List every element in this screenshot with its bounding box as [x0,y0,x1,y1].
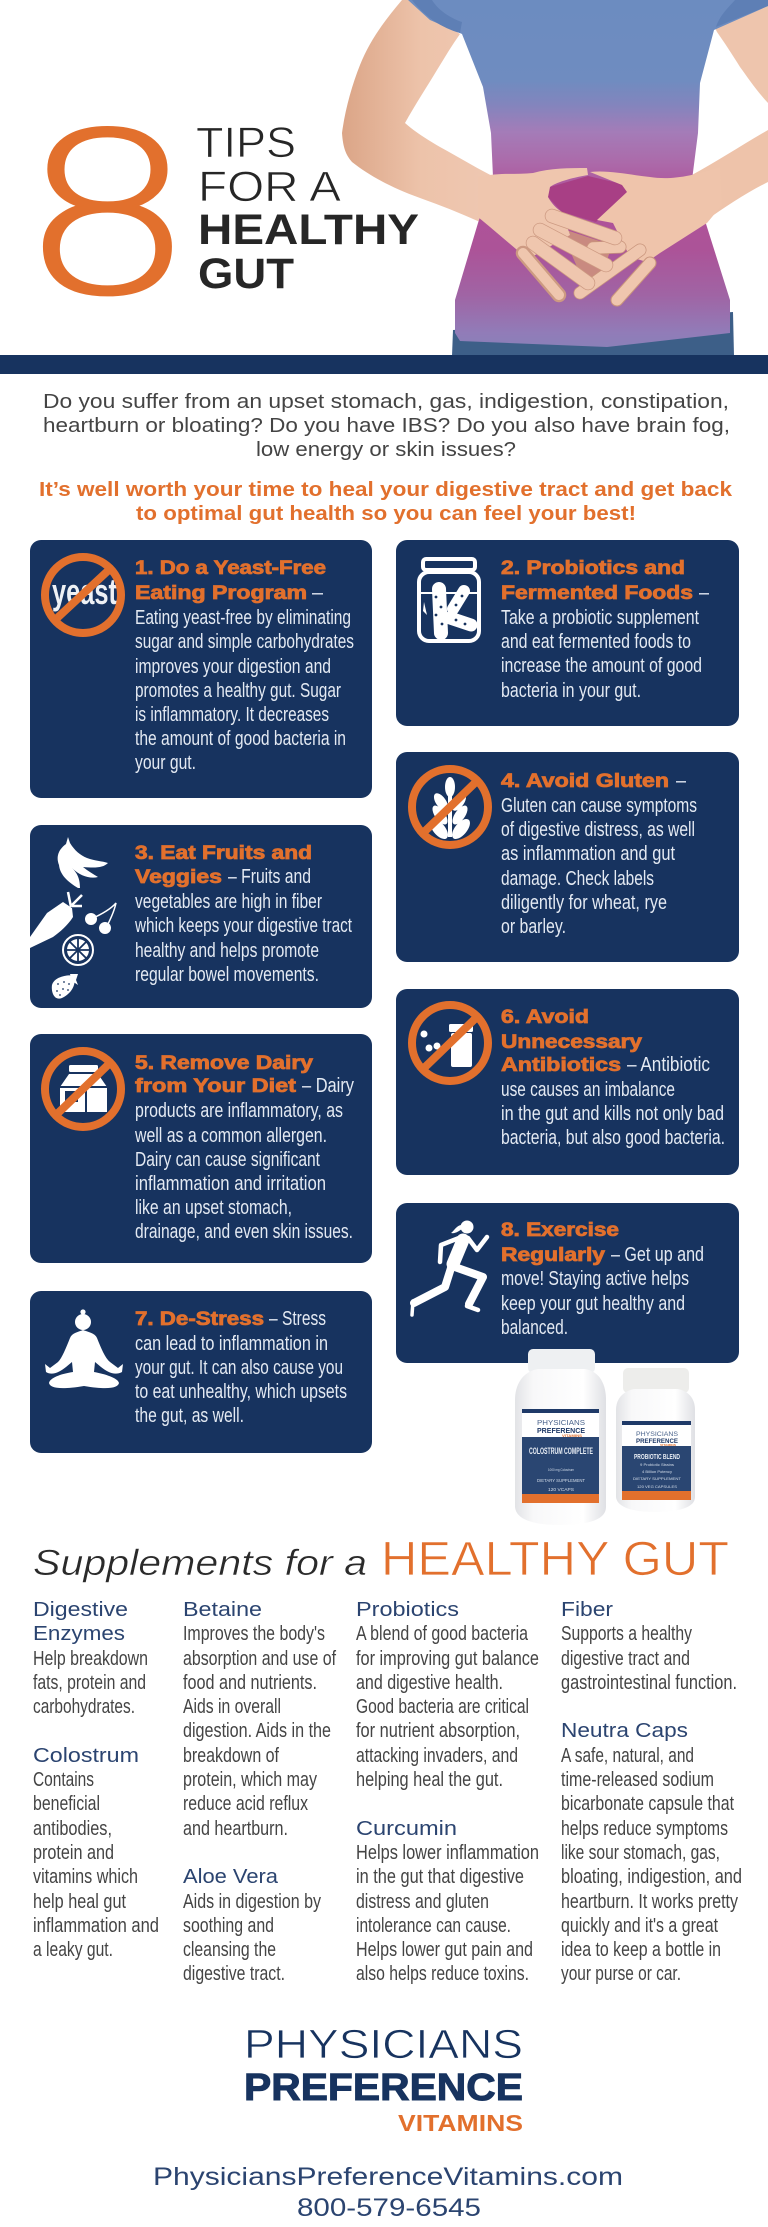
bottle: colostrum complete: COLOSTRUM COMPLETE [529,1446,593,1456]
panel: tip 1 yeast-free: is inflammatory. It decreases [135,704,329,726]
panel: tip 4 avoid gluten: or barley. [501,916,566,938]
panel: tip 8 exercise: 8. Exercise [501,1220,619,1241]
panel: tip 7 de-stress: the gut, as well. [135,1405,244,1427]
bottle: colostrum complete: 120 VCAPS [548,1487,574,1492]
bottle: probiotic blend: VITAMINS [660,1443,676,1447]
panel: tip 5 remove dairy: like an upset stomach, [135,1197,292,1219]
curcumin [356,1818,539,1985]
neutra caps: helps reduce symptoms [561,1818,728,1840]
icon: no dairy [45,1051,121,1127]
panel: tip 3 fruits and veggies: 3. Eat Fruits and [135,843,312,864]
panel: tip 1 yeast-free: promotes a healthy gut. Sugar [135,680,341,702]
right upper arm [714,6,768,103]
panel: tip 8 exercise [396,1203,739,1363]
aloe vera: cleansing the [183,1939,276,1961]
orange callout [39,479,733,525]
betaine: reduce acid reflux [183,1793,308,1815]
panel: tip 2 probiotics: 2. Probiotics and [501,558,685,579]
orange callout: to optimal gut health so you can feel your best! [136,503,636,525]
neutra caps: Neutra Caps [561,1720,688,1742]
bottle: colostrum complete: VITAMINS [562,1433,582,1438]
colostrum: protein and [33,1842,114,1864]
heading: supplements for a healthy gut [33,1533,729,1586]
neutra caps: like sour stomach, gas, [561,1842,720,1864]
curcumin: Helps lower inflammation [356,1842,539,1864]
website and phone: 800-579-6545 [297,2194,481,2222]
panel: tip 8 exercise: move! Staying active helps [501,1268,689,1290]
title: HEALTHY [198,206,419,254]
aloe vera: Aids in digestion by [183,1891,321,1913]
panel: tip 1 yeast-free: 1. Do a Yeast-Free [135,558,326,579]
aloe vera: Aloe Vera [183,1866,279,1888]
panel: tip 4 avoid gluten: damage. Check labels [501,868,654,890]
panel: tip 5 remove dairy: – Dairy [302,1075,354,1097]
panel: tip 6 avoid antibiotics: use causes an imbalance [501,1079,675,1101]
panel: tip 2 probiotics: Take a probiotic supplement [501,607,699,629]
panel: tip 5 remove dairy [30,1034,372,1263]
digestive enzymes: carbohydrates. [33,1696,135,1718]
panel: tip 1 yeast-free: Eating yeast-free by eliminating [135,607,351,629]
digestive enzymes: Help breakdown [33,1648,148,1670]
panel: tip 4 avoid gluten: – [676,770,687,792]
diamond of shirt between hands [548,176,627,222]
icon: no wheat [412,769,488,845]
title [196,119,419,298]
neutra caps: quickly and it's a great [561,1915,718,1937]
intro text [43,391,730,461]
jeans [452,312,734,356]
curcumin: distress and gluten [356,1891,489,1913]
colostrum: help heal gut [33,1891,126,1913]
panel: tip 3 fruits and veggies: Veggies [135,867,222,888]
title: GUT [198,250,294,298]
intro text: Do you suffer from an upset stomach, gas, indigestion, constipation, [43,391,729,413]
website and phone: PhysiciansPreferenceVitamins.com [153,2163,623,2191]
neutra caps: your purse or car. [561,1963,681,1985]
probiotics: and digestive health. [356,1672,503,1694]
panel: tip 7 de-stress: your gut. It can also cause you [135,1357,343,1379]
panel: tip 2 probiotics: bacteria in your gut. [501,680,641,702]
panel: tip 4 avoid gluten: Gluten can cause symptoms [501,795,697,817]
logo: physicians preference vitamins [244,2021,523,2136]
supplements column 1 [33,1599,159,1961]
bottle: colostrum complete: PREFERENCE [537,1428,585,1435]
probiotics: helping heal the gut. [356,1769,503,1791]
panel: tip 4 avoid gluten: 4. Avoid Gluten [501,771,669,792]
icon: fruits and vegetables [30,837,116,999]
panel: tip 5 remove dairy: 5. Remove Dairy [135,1053,314,1074]
panel: tip 8 exercise: keep your gut healthy and [501,1293,685,1315]
bottle: probiotic blend: 4 Billion Potency [642,1470,672,1474]
colostrum: Colostrum [33,1745,139,1767]
betaine: Betaine [183,1599,262,1621]
supplements column 4 [561,1599,742,1985]
betaine: Aids in overall [183,1696,281,1718]
colostrum: antibodies, [33,1818,112,1840]
panel: tip 5 remove dairy: well as a common allergen. [134,1125,327,1147]
bottle: probiotic blend: DIETARY SUPPLEMENT [633,1476,682,1481]
left upper arm and forearm [342,0,500,222]
supplements column 3 [356,1599,539,1985]
betaine: Improves the body's [183,1623,325,1645]
probiotics: attacking invaders, and [356,1745,518,1767]
panel: tip 1 yeast-free: – [312,582,324,604]
panel: tip 1 yeast-free: sugar and simple carbohydrates [135,631,354,653]
digestive enzymes: fats, protein and [33,1672,146,1694]
betaine: digestion. Aids in the [183,1720,331,1742]
big number 8: 8 [18,87,197,345]
logo: physicians preference vitamins: VITAMINS [398,2110,523,2136]
icon: no yeast: yeast [52,571,117,612]
bottle: probiotic blend [616,1368,695,1512]
panel: tip 3 fruits and veggies: – Fruits and [228,866,311,888]
betaine [183,1599,336,1840]
bottle: colostrum complete [515,1349,606,1525]
left hand [478,168,615,295]
bottle: probiotic blend: 120 VEG CAPSULES [637,1484,677,1489]
panel: tip 7 de-stress: to eat unhealthy, which upsets [135,1381,347,1403]
panel: tip 4 avoid gluten: diligently for wheat, rye [501,892,667,914]
neutra caps [561,1720,742,1985]
orange callout: It’s well worth your time to heal your digestive tract and get back [39,479,733,501]
digestive enzymes: Enzymes [33,1623,125,1645]
panel: tip 5 remove dairy: Dairy can cause significant [135,1149,320,1171]
logo: physicians preference vitamins: PREFERENCE [244,2067,523,2109]
panel: tip 6 avoid antibiotics: – Antibiotic [627,1054,710,1076]
right hand [580,167,722,300]
probiotics [356,1599,539,1791]
title: FOR A [198,163,341,211]
aloe vera [183,1866,321,1985]
probiotics: Probiotics [356,1599,459,1621]
panel: tip 8 exercise: Regularly [501,1245,606,1266]
icon: no yeast [45,557,121,633]
panel: tip 4 avoid gluten [396,752,739,962]
title: TIPS [196,119,296,167]
intro text: heartburn or bloating? Do you have IBS? Do you also have brain fog, [43,415,730,437]
icon: runner [412,1220,487,1315]
digestive enzymes [33,1599,148,1718]
panel: tip 3 fruits and veggies: vegetables are high in fiber [135,891,322,913]
panel: tip 3 fruits and veggies: healthy and helps promote [135,940,319,962]
panel: tip 8 exercise: – Get up and [611,1244,704,1266]
neutra caps: time-released sodium [561,1769,714,1791]
photo: woman holding her stomach [342,0,768,356]
bottle: probiotic blend: PROBIOTIC BLEND [634,1452,680,1461]
aloe vera: digestive tract. [183,1963,285,1985]
panel: tip 7 de-stress: can lead to inflammation in [135,1333,328,1355]
panel: tip 8 exercise: balanced. [501,1317,568,1339]
panel: tip 2 probiotics: increase the amount of good [501,655,702,677]
probiotics: for nutrient absorption, [356,1720,520,1742]
panel: tip 5 remove dairy: products are inflammatory, as [135,1100,343,1122]
bottle: probiotic blend: 9 Probiotic Strains [640,1463,674,1467]
panel: tip 6 avoid antibiotics: Antibiotics [501,1055,621,1076]
icon: meditating figure [45,1309,123,1388]
panel: tip 7 de-stress: – Stress [269,1308,326,1330]
panel: tip 5 remove dairy: inflammation and irritation [135,1173,326,1195]
betaine: protein, which may [183,1769,317,1791]
bottle: probiotic blend: PHYSICIANS [636,1432,678,1438]
panel: tip 1 yeast-free: the amount of good bacteria in [135,728,346,750]
panel: tip 5 remove dairy: from Your Diet [135,1076,297,1097]
bottle: probiotic blend: PREFERENCE [636,1439,678,1445]
panel: tip 7 de-stress: 7. De-Stress [135,1309,264,1330]
panel: tip 4 avoid gluten: as inflammation and gut [501,843,675,865]
intro text: low energy or skin issues? [256,439,516,461]
digestive enzymes: Digestive [33,1599,128,1621]
panel: tip 2 probiotics: Fermented Foods [501,583,693,604]
product bottles [515,1349,695,1525]
colostrum: Contains [33,1769,94,1791]
bottle: colostrum complete: 1000 mg Colostrum [548,1468,574,1472]
curcumin: Curcumin [356,1818,457,1840]
betaine: food and nutrients. [183,1672,317,1694]
probiotics: for improving gut balance [356,1648,539,1670]
betaine: breakdown of [183,1745,279,1767]
colostrum: vitamins which [33,1866,138,1888]
shadow between fingers [560,228,612,285]
panel: tip 2 probiotics: and eat fermented foods to [501,631,691,653]
bottle: colostrum complete: DIETARY SUPPLEMENT [537,1478,585,1483]
panel: tip 6 avoid antibiotics [396,989,739,1175]
panel: tip 6 avoid antibiotics: in the gut and kills not only bad [501,1103,724,1125]
website and phone [153,2163,623,2222]
neutra caps: idea to keep a bottle in [561,1939,721,1961]
heading: supplements for a healthy gut: Supplements for a [33,1542,367,1583]
panel: tip 1 yeast-free: Eating Program [135,583,307,604]
bottle: colostrum complete: PHYSICIANS [537,1420,585,1427]
neutra caps: A safe, natural, and [561,1745,694,1767]
betaine: and heartburn. [183,1818,288,1840]
icon: no antibiotics [412,1005,488,1081]
panel: tip 2 probiotics: – [699,582,710,604]
logo: physicians preference vitamins: PHYSICIANS [244,2021,523,2067]
panel: tip 1 yeast-free: your gut. [135,752,196,774]
panel: tip 6 avoid antibiotics: 6. Avoid [501,1007,589,1028]
shirt sleeve shading [412,0,768,33]
curcumin: also helps reduce toxins. [356,1963,529,1985]
panel: tip 4 avoid gluten: of digestive distress, as well [501,819,695,841]
panel: tip 3 fruits and veggies: regular bowel movements. [135,964,319,986]
panel: tip 5 remove dairy: drainage, and even skin issues. [135,1221,353,1243]
curcumin: in the gut that digestive [356,1866,524,1888]
panel: tip 6 avoid antibiotics: Unnecessary [501,1032,643,1053]
panel: tip 7 de-stress [30,1291,372,1453]
probiotics: Good bacteria are critical [356,1696,529,1718]
supplements column 2 [183,1599,336,1985]
blue and magenta t-shirt [408,0,768,347]
aloe vera: soothing and [183,1915,274,1937]
colostrum: beneficial [33,1793,100,1815]
colostrum [33,1745,159,1961]
curcumin: Helps lower gut pain and [356,1939,533,1961]
colostrum: inflammation and [33,1915,159,1937]
panel: tip 3 fruits and veggies: which keeps your digestive tract [134,915,352,937]
betaine: absorption and use of [183,1648,336,1670]
heading: supplements for a healthy gut: HEALTHY GUT [381,1533,729,1586]
panel: tip 1 yeast-free: improves your digestion and [135,656,331,678]
fiber: Supports a healthy [561,1623,692,1645]
navy banner [0,355,768,374]
panel: tip 2 probiotics [396,540,739,726]
panel: tip 3 fruits and veggies [30,825,372,1008]
fiber [561,1599,737,1694]
fiber: Fiber [561,1599,613,1621]
colostrum: a leaky gut. [33,1939,113,1961]
panel: tip 1 yeast-free [30,540,372,798]
right forearm [690,130,768,222]
curcumin: intolerance can cause. [356,1915,511,1937]
probiotics: A blend of good bacteria [356,1623,529,1645]
fiber: digestive tract and [561,1648,690,1670]
icon: pickle jar [419,559,479,641]
